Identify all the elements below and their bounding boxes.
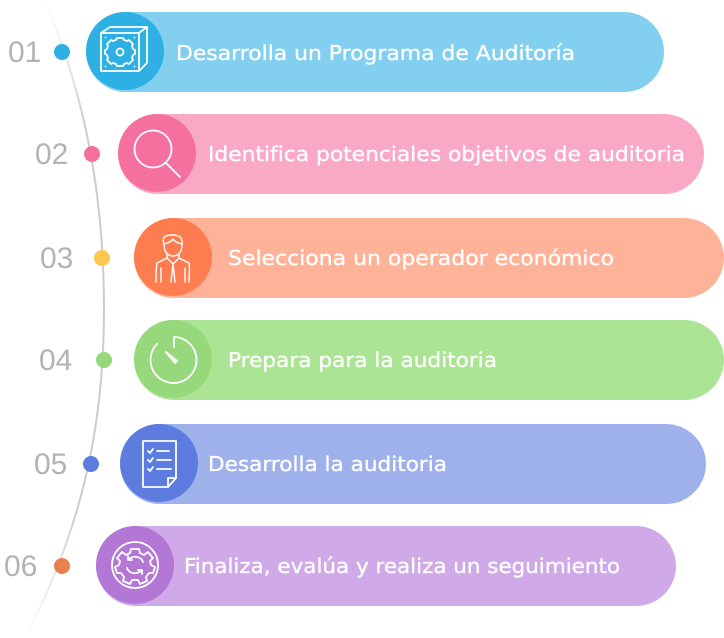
step 01 — [8, 12, 664, 92]
timeline dot 02 — [84, 146, 100, 162]
number 05: 05 — [34, 448, 67, 481]
pill 02 — [118, 114, 704, 194]
timeline dot 04 — [96, 352, 112, 368]
number 03: 03 — [40, 242, 73, 275]
icon: checklist — [143, 441, 176, 487]
number 01: 01 — [8, 36, 41, 69]
step 02 — [35, 114, 704, 194]
icon circle 03 — [134, 218, 212, 296]
timeline arc — [28, 0, 104, 632]
icon: gear with arrows — [112, 542, 158, 588]
icon: gear in box — [101, 27, 147, 71]
pill 01 — [86, 12, 664, 92]
icon circle 01 — [86, 12, 164, 90]
step 03 label: Selecciona un operador económico — [228, 246, 614, 270]
step 06 label: Finaliza, evalúa y realiza un seguimiento — [184, 554, 620, 578]
step 02 label: Identifica potenciales objetivos de auditoria — [208, 142, 685, 166]
step 04 label: Prepara para la auditoria — [228, 348, 497, 372]
icon circle 05 — [120, 424, 198, 502]
icon: magnifying glass — [134, 130, 180, 177]
icon circle 02 — [118, 114, 196, 192]
number 06: 06 — [4, 550, 37, 583]
timeline dot 05 — [83, 456, 99, 472]
step 01 label: Desarrolla un Programa de Auditoría — [176, 41, 575, 65]
step 06 — [4, 526, 676, 606]
pill 05 — [120, 424, 706, 504]
icon: businessman — [156, 235, 189, 282]
step 05 — [34, 424, 706, 504]
pill 03 — [134, 218, 724, 298]
step 05 label: Desarrolla la auditoria — [208, 452, 447, 476]
timeline dot 01 — [54, 44, 70, 60]
pill 06 — [96, 526, 676, 606]
step 03 — [40, 218, 724, 298]
pill 04 — [134, 320, 724, 400]
step 04 — [39, 320, 724, 400]
icon circle 04 — [134, 320, 212, 398]
icon circle 06 — [96, 526, 174, 604]
icon: stopwatch dial — [151, 337, 197, 383]
number 04: 04 — [39, 344, 72, 377]
timeline dot 03 — [94, 250, 110, 266]
number 02: 02 — [35, 138, 68, 171]
timeline dot 06 — [54, 558, 70, 574]
